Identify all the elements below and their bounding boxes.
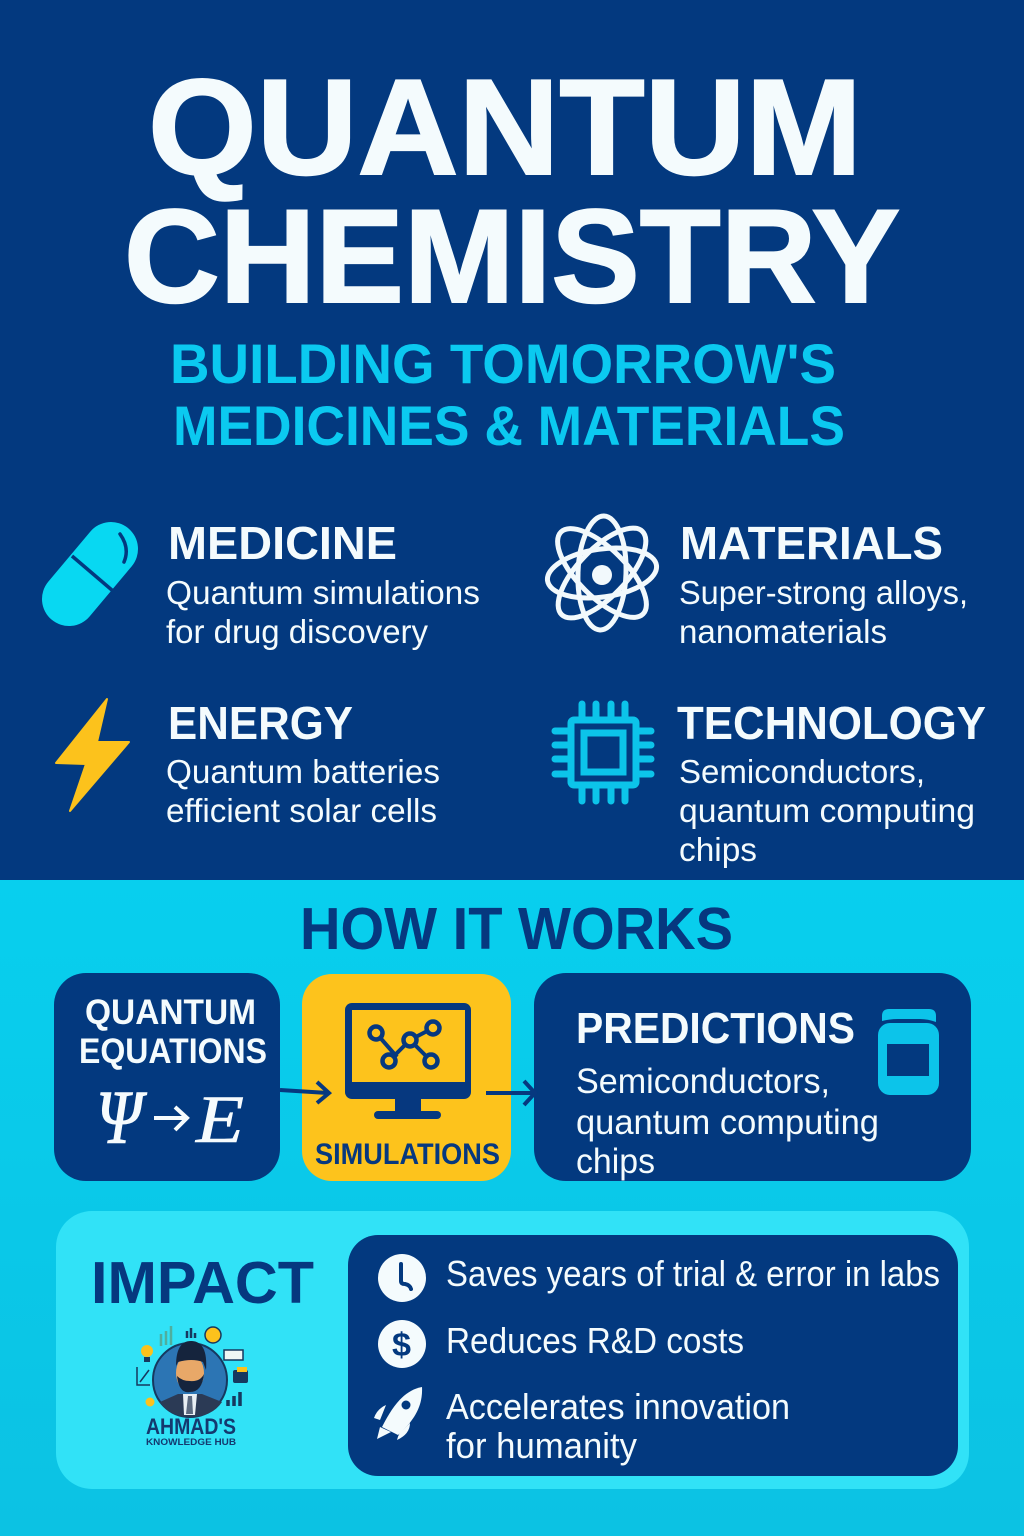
text: energy description: Quantum batteries	[166, 753, 440, 790]
panel: medicine	[69, 517, 480, 650]
icon: chip	[555, 704, 651, 801]
arrow: equations to simulations	[280, 1082, 329, 1103]
heading: materials: MATERIALS	[680, 517, 943, 569]
text: predictions description: chips	[576, 1142, 655, 1181]
title	[124, 51, 900, 331]
text: technology description: Semiconductors,	[679, 753, 925, 790]
heading: energy: ENERGY	[168, 697, 353, 749]
text: materials description: Super-strong alloys,	[679, 574, 968, 611]
heading: impact: IMPACT	[91, 1250, 314, 1316]
text: predictions description: Semiconductors,	[576, 1062, 830, 1101]
heading: quantum equations	[79, 993, 267, 1071]
panel: technology	[555, 697, 986, 868]
logo: Ahmad's Knowledge Hub: AHMAD'S	[146, 1414, 236, 1439]
text: medicine description: Quantum simulations	[166, 574, 480, 611]
subtitle: MEDICINES & MATERIALS	[173, 394, 845, 457]
text: technology description: chips	[679, 831, 757, 868]
icon: clock	[378, 1254, 426, 1302]
icon: atom	[544, 515, 660, 631]
panel: impact	[56, 1211, 969, 1489]
text: energy description: efficient solar cells	[166, 792, 437, 829]
arrow: simulations to predictions	[486, 1081, 535, 1105]
text: accelerates innovation: for humanity	[446, 1425, 637, 1466]
panel: materials	[544, 515, 968, 650]
panel: quantum equations	[54, 973, 280, 1181]
text: medicine description: for drug discovery	[166, 613, 428, 650]
text: technology description	[679, 753, 975, 868]
text: medicine description	[166, 574, 480, 650]
subtitle	[170, 332, 845, 457]
text: technology description: quantum computing	[679, 792, 975, 829]
heading: medicine: MEDICINE	[168, 517, 397, 569]
icon: jar	[878, 1009, 939, 1095]
logo: Ahmad's Knowledge Hub	[137, 1326, 248, 1448]
equation: psi to E: E	[195, 1081, 244, 1157]
label: simulations: SIMULATIONS	[315, 1138, 500, 1171]
panel: impact list	[348, 1235, 958, 1476]
text: accelerates innovation	[446, 1386, 790, 1466]
heading: quantum equations: QUANTUM	[85, 993, 256, 1032]
icon: capsule	[69, 534, 126, 599]
title: CHEMISTRY	[124, 183, 900, 331]
text: energy description	[166, 753, 440, 829]
panel: predictions	[534, 973, 971, 1181]
title: QUANTUM	[148, 51, 862, 203]
icon: dollar: $	[392, 1326, 411, 1363]
text: accelerates innovation: Accelerates innovation	[446, 1386, 790, 1427]
heading: how it works: HOW IT WORKS	[300, 896, 733, 962]
icon: monitor with network	[345, 1003, 471, 1119]
icon: lightning bolt	[56, 699, 129, 811]
heading: predictions: PREDICTIONS	[576, 1004, 855, 1053]
panel: energy	[56, 697, 440, 829]
panel: simulations	[302, 974, 511, 1181]
equation: psi to E	[96, 1076, 244, 1160]
icon: dollar	[378, 1320, 426, 1368]
logo: Ahmad's Knowledge Hub: KNOWLEDGE HUB	[146, 1437, 236, 1448]
text: predictions description: quantum computing	[576, 1103, 879, 1142]
text: materials description: nanomaterials	[679, 613, 887, 650]
icon: rocket	[374, 1387, 422, 1440]
heading: technology: TECHNOLOGY	[677, 697, 986, 749]
text: saves years: Saves years of trial & error in labs	[446, 1253, 940, 1294]
subtitle: BUILDING TOMORROW'S	[170, 332, 836, 395]
text: materials description	[679, 574, 968, 650]
text: reduces costs: Reduces R&D costs	[446, 1320, 744, 1361]
heading: quantum equations: EQUATIONS	[79, 1032, 267, 1071]
equation: psi to E: Ψ	[96, 1076, 148, 1160]
text: predictions description	[576, 1062, 879, 1181]
